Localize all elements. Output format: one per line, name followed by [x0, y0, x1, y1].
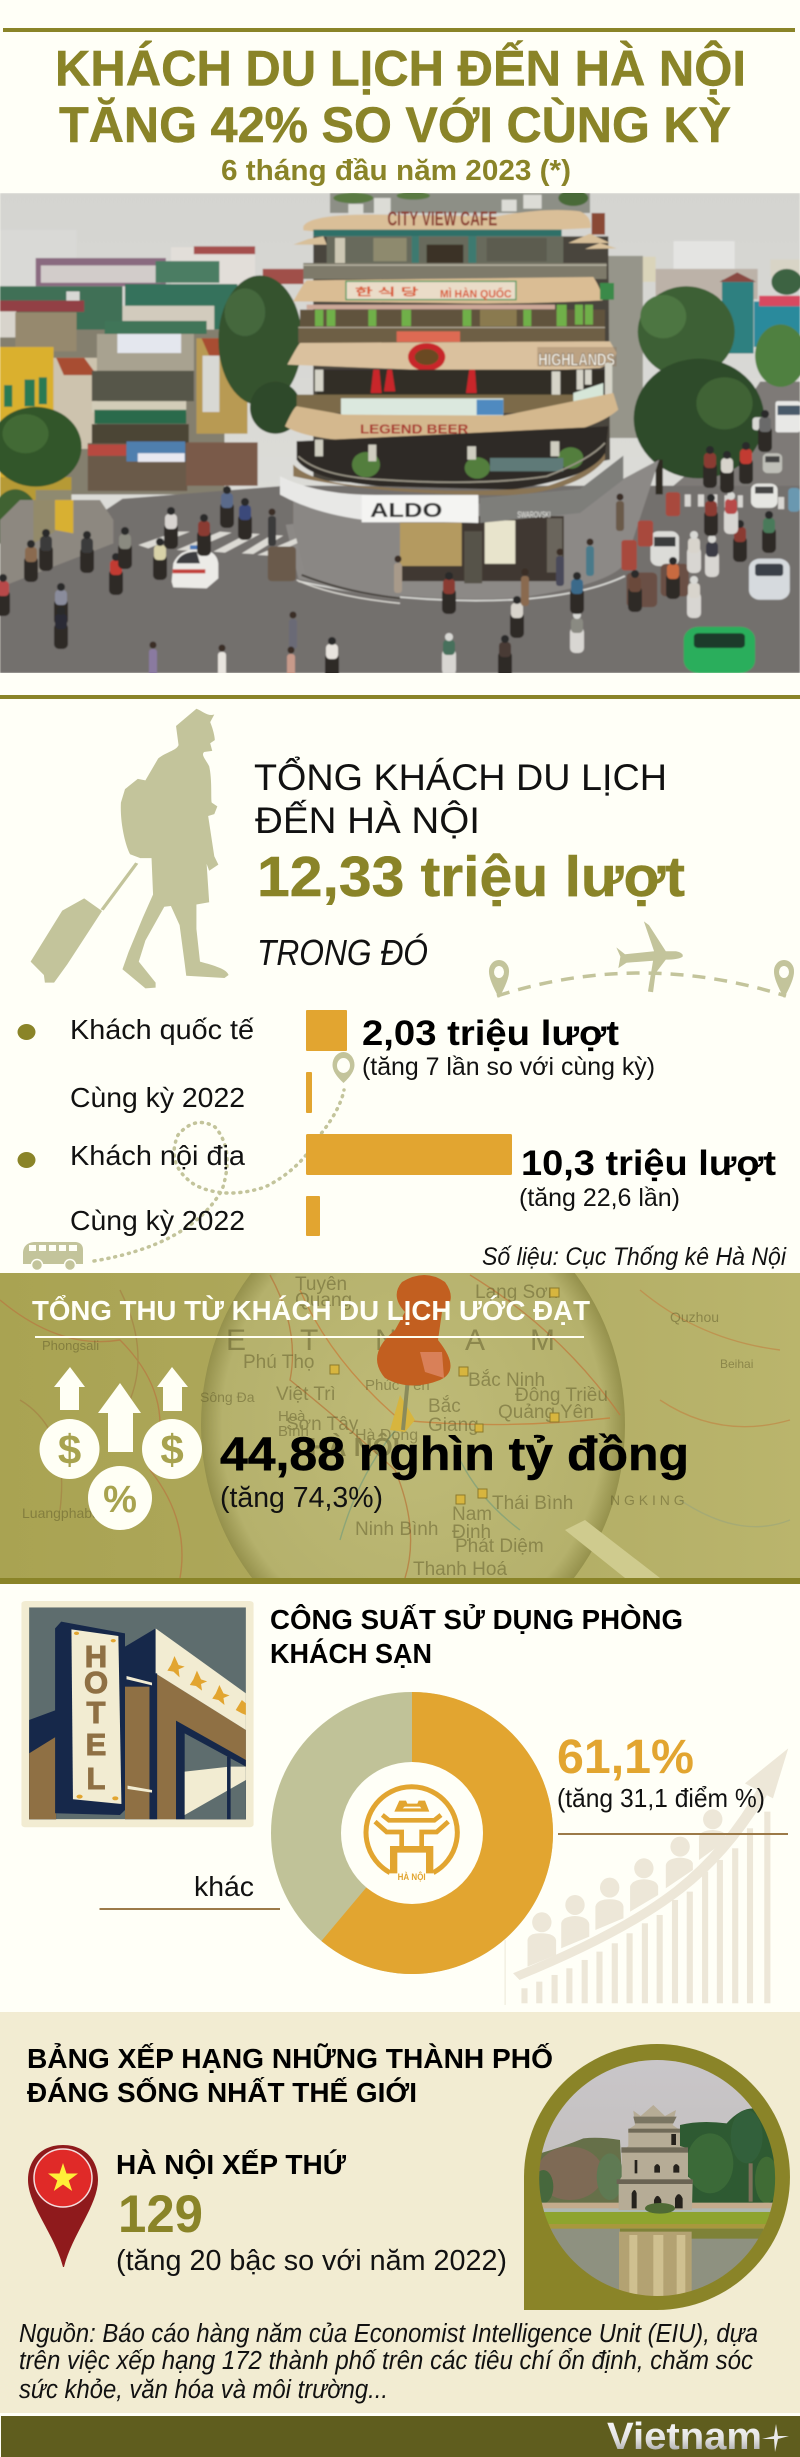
map background: Sơn Tây — [286, 1414, 359, 1435]
Hanoi emblem: HÀ NỘI — [398, 1871, 426, 1882]
source note: sức khỏe, văn hóa và môi trường... — [19, 2376, 388, 2404]
left street — [0, 500, 400, 603]
map background: Phú Thọ — [243, 1352, 314, 1373]
map background: Việt Trì — [276, 1384, 336, 1405]
hotel illustration — [21, 1601, 254, 1827]
map background: Định — [452, 1522, 491, 1543]
background chart: rising people — [505, 1748, 788, 2005]
floor 1 — [327, 236, 563, 266]
map background: Phúc Yên — [365, 1377, 430, 1394]
central building: ALDO — [370, 499, 442, 522]
Hanoi emblem — [366, 1787, 457, 1882]
map background: Phát Diệm — [455, 1536, 544, 1557]
map background: A — [465, 1324, 485, 1357]
title line 1: KHÁCH DU LỊCH ĐẾN HÀ NỘI — [55, 40, 746, 96]
far tree line — [540, 2138, 623, 2207]
value: 61,1%: 61,1% — [557, 1731, 694, 1784]
icon: traveller silhouette — [31, 709, 229, 988]
taxi — [172, 549, 218, 588]
backdrop — [0, 193, 800, 673]
row: international visitors: 2,03 triệu lượt — [362, 1014, 619, 1053]
map background: M — [530, 1324, 555, 1357]
row: international visitors — [18, 1010, 655, 1081]
red pushpin — [377, 1275, 451, 1430]
heading: hotels: KHÁCH SẠN — [270, 1638, 432, 1669]
map background: Ninh Bình — [355, 1519, 438, 1540]
logo: Vietnam+: Vietnam — [607, 2416, 762, 2457]
icon: Vietnam flag pin — [28, 2145, 98, 2267]
row: domestic visitors same period 2022 — [70, 1196, 320, 1236]
map background: Bắc Ninh — [468, 1369, 545, 1391]
heading: room occupancy: CÔNG SUẤT SỬ DỤNG PHÒNG — [270, 1603, 683, 1635]
floor 2 — [300, 310, 605, 328]
map background: N — [375, 1324, 397, 1357]
photo: Hanoi street corner — [0, 190, 800, 684]
panel: total visitors — [18, 709, 794, 1271]
text: of which: TRONG ĐÓ — [257, 932, 428, 973]
map background: Bình — [278, 1423, 309, 1440]
map background: Hà Đông — [355, 1427, 418, 1444]
trees left — [218, 275, 302, 406]
source note: trên việc xếp hạng 172 thành phố trên các tiêu chí ổn định, chăm sóc — [19, 2347, 753, 2375]
top rule — [3, 28, 795, 32]
subtitle: 6 tháng đầu năm 2023 (*) — [221, 155, 571, 187]
central building: LEGEND BEER — [360, 423, 468, 437]
source note: Nguồn: Báo cáo hàng năm của Economist Intelligence Unit (EIU), dựa — [19, 2320, 758, 2348]
map background: Đông Triều — [515, 1385, 608, 1406]
central building: CITY VIEW CAFE — [387, 209, 497, 231]
section heading: TỔNG THU TỪ KHÁCH DU LỊCH ƯỚC ĐẠT — [32, 1295, 590, 1326]
right-side cars — [268, 401, 800, 673]
rank change: (tăng 20 bậc so với năm 2022) — [116, 2245, 507, 2277]
map background: Luangphabang — [22, 1505, 115, 1521]
text: Hanoi ranks: HÀ NỘI XẾP THỨ — [116, 2148, 347, 2180]
map background: Beihai — [720, 1357, 753, 1371]
central building — [280, 190, 623, 523]
road — [673, 380, 800, 487]
map background: Quảng Yên — [498, 1402, 594, 1423]
trees right — [638, 286, 735, 377]
floor 3 — [317, 370, 607, 398]
map background: Bắc — [428, 1395, 461, 1417]
map background: Thái Bình — [492, 1493, 573, 1514]
motorbikes and pedestrians — [0, 410, 776, 684]
row: international visitors: (tăng 7 lần so với cùng kỳ) — [362, 1053, 655, 1081]
icon: plane route — [489, 921, 794, 998]
map background: Phongsali — [42, 1338, 99, 1353]
map background: Thanh Hoá — [413, 1559, 507, 1580]
map background: Quzhou — [670, 1309, 719, 1325]
map background — [0, 1273, 800, 1578]
map background: Sông Đa — [200, 1389, 255, 1405]
map background: Lạng Sơn — [475, 1282, 558, 1303]
bottom rule — [0, 1578, 800, 1584]
shop level — [400, 515, 564, 582]
title line 2: TĂNG 42% SO VỚI CÙNG KỲ — [59, 97, 731, 153]
section rule — [0, 695, 800, 699]
big number: 12,33 triệu lượt — [257, 845, 685, 909]
row: domestic visitors: (tăng 22,6 lần) — [519, 1184, 680, 1212]
band 4 — [285, 393, 618, 443]
row: domestic visitors same period 2022: Cùng kỳ 2022 — [70, 1205, 245, 1236]
map background: HÀ NỘI — [309, 1432, 400, 1462]
footer — [1, 2416, 800, 2457]
donut chart — [271, 1692, 553, 1974]
row: domestic visitors: 10,3 triệu lượt — [521, 1144, 776, 1183]
source note — [19, 2320, 758, 2404]
map background: Quang — [295, 1290, 352, 1311]
hotel sign letters — [84, 1639, 108, 1796]
icon: money growth: $ — [160, 1426, 184, 1473]
central building: MÌ HÀN QUỐC — [440, 287, 512, 301]
leader line — [100, 1908, 280, 1910]
map background: T — [300, 1324, 318, 1357]
decorative bus route — [23, 1090, 344, 1270]
map lines — [0, 1275, 790, 1578]
map background: E — [226, 1324, 246, 1357]
row: domestic visitors — [18, 1134, 776, 1212]
right sidewalk — [286, 460, 659, 599]
icon: bus — [23, 1242, 83, 1270]
leader line — [558, 1833, 788, 1835]
shop signs — [280, 476, 478, 523]
row: domestic visitors: Khách nội địa — [70, 1140, 245, 1171]
hotel sign letters: L — [87, 1761, 105, 1796]
icon: map pin — [332, 1052, 354, 1083]
hotel sign letters: T — [87, 1695, 106, 1730]
hotel sign letters: E — [86, 1727, 106, 1762]
row: international visitors: Khách quốc tế — [70, 1014, 254, 1045]
central building: 한 식 당 — [355, 286, 420, 299]
shoreline — [537, 2203, 780, 2209]
icon: money growth: $ — [58, 1426, 81, 1473]
row: international visitors same period 2022: Cùng kỳ 2022 — [70, 1082, 245, 1113]
central building: SWAROVSKI — [517, 510, 551, 520]
heading line 1: BẢNG XẾP HẠNG NHỮNG THÀNH PHỐ — [27, 2042, 553, 2074]
tower — [619, 2105, 693, 2210]
label: other: khác — [194, 1871, 254, 1902]
icon: money growth — [40, 1367, 202, 1530]
central building: HIGHLANDS — [538, 349, 615, 369]
revenue amount: 44,88 nghìn tỷ đồng — [220, 1427, 689, 1480]
right skyline — [674, 241, 734, 269]
photo: Turtle Tower, Hoan Kiem lake — [524, 2044, 790, 2310]
floor 4 — [297, 426, 608, 490]
map background: Giang — [428, 1415, 479, 1436]
heading: to Hanoi: ĐẾN HÀ NỘI — [255, 800, 480, 841]
map background: Hoà — [278, 1408, 306, 1425]
occupancy change: (tăng 31,1 điểm %) — [557, 1783, 765, 1813]
hotel sign letters: H — [85, 1639, 107, 1674]
band 2 — [293, 277, 603, 303]
panel: hotel occupancy — [21, 1601, 788, 2005]
map background: Tuyên — [295, 1274, 347, 1295]
heading line 2: ĐÁNG SỐNG NHẤT THẾ GIỚI — [27, 2076, 417, 2108]
map background: Nam — [452, 1504, 492, 1525]
band 3 — [287, 341, 617, 371]
heading rule — [35, 1336, 584, 1338]
icon: money growth: % — [103, 1479, 137, 1521]
heading: total visitors: TỔNG KHÁCH DU LỊCH — [254, 755, 667, 798]
hotel sign letters: O — [84, 1665, 108, 1700]
revenue change: (tăng 74,3%) — [220, 1482, 383, 1514]
map background: N G K I N G — [610, 1492, 685, 1508]
panel: revenue on map background — [0, 1273, 800, 1584]
water — [550, 2228, 764, 2291]
row: international visitors same period 2022 — [70, 1072, 312, 1113]
panel: liveability ranking — [0, 2012, 800, 2413]
value: rank 129: 129 — [118, 2185, 203, 2244]
header — [3, 28, 795, 187]
